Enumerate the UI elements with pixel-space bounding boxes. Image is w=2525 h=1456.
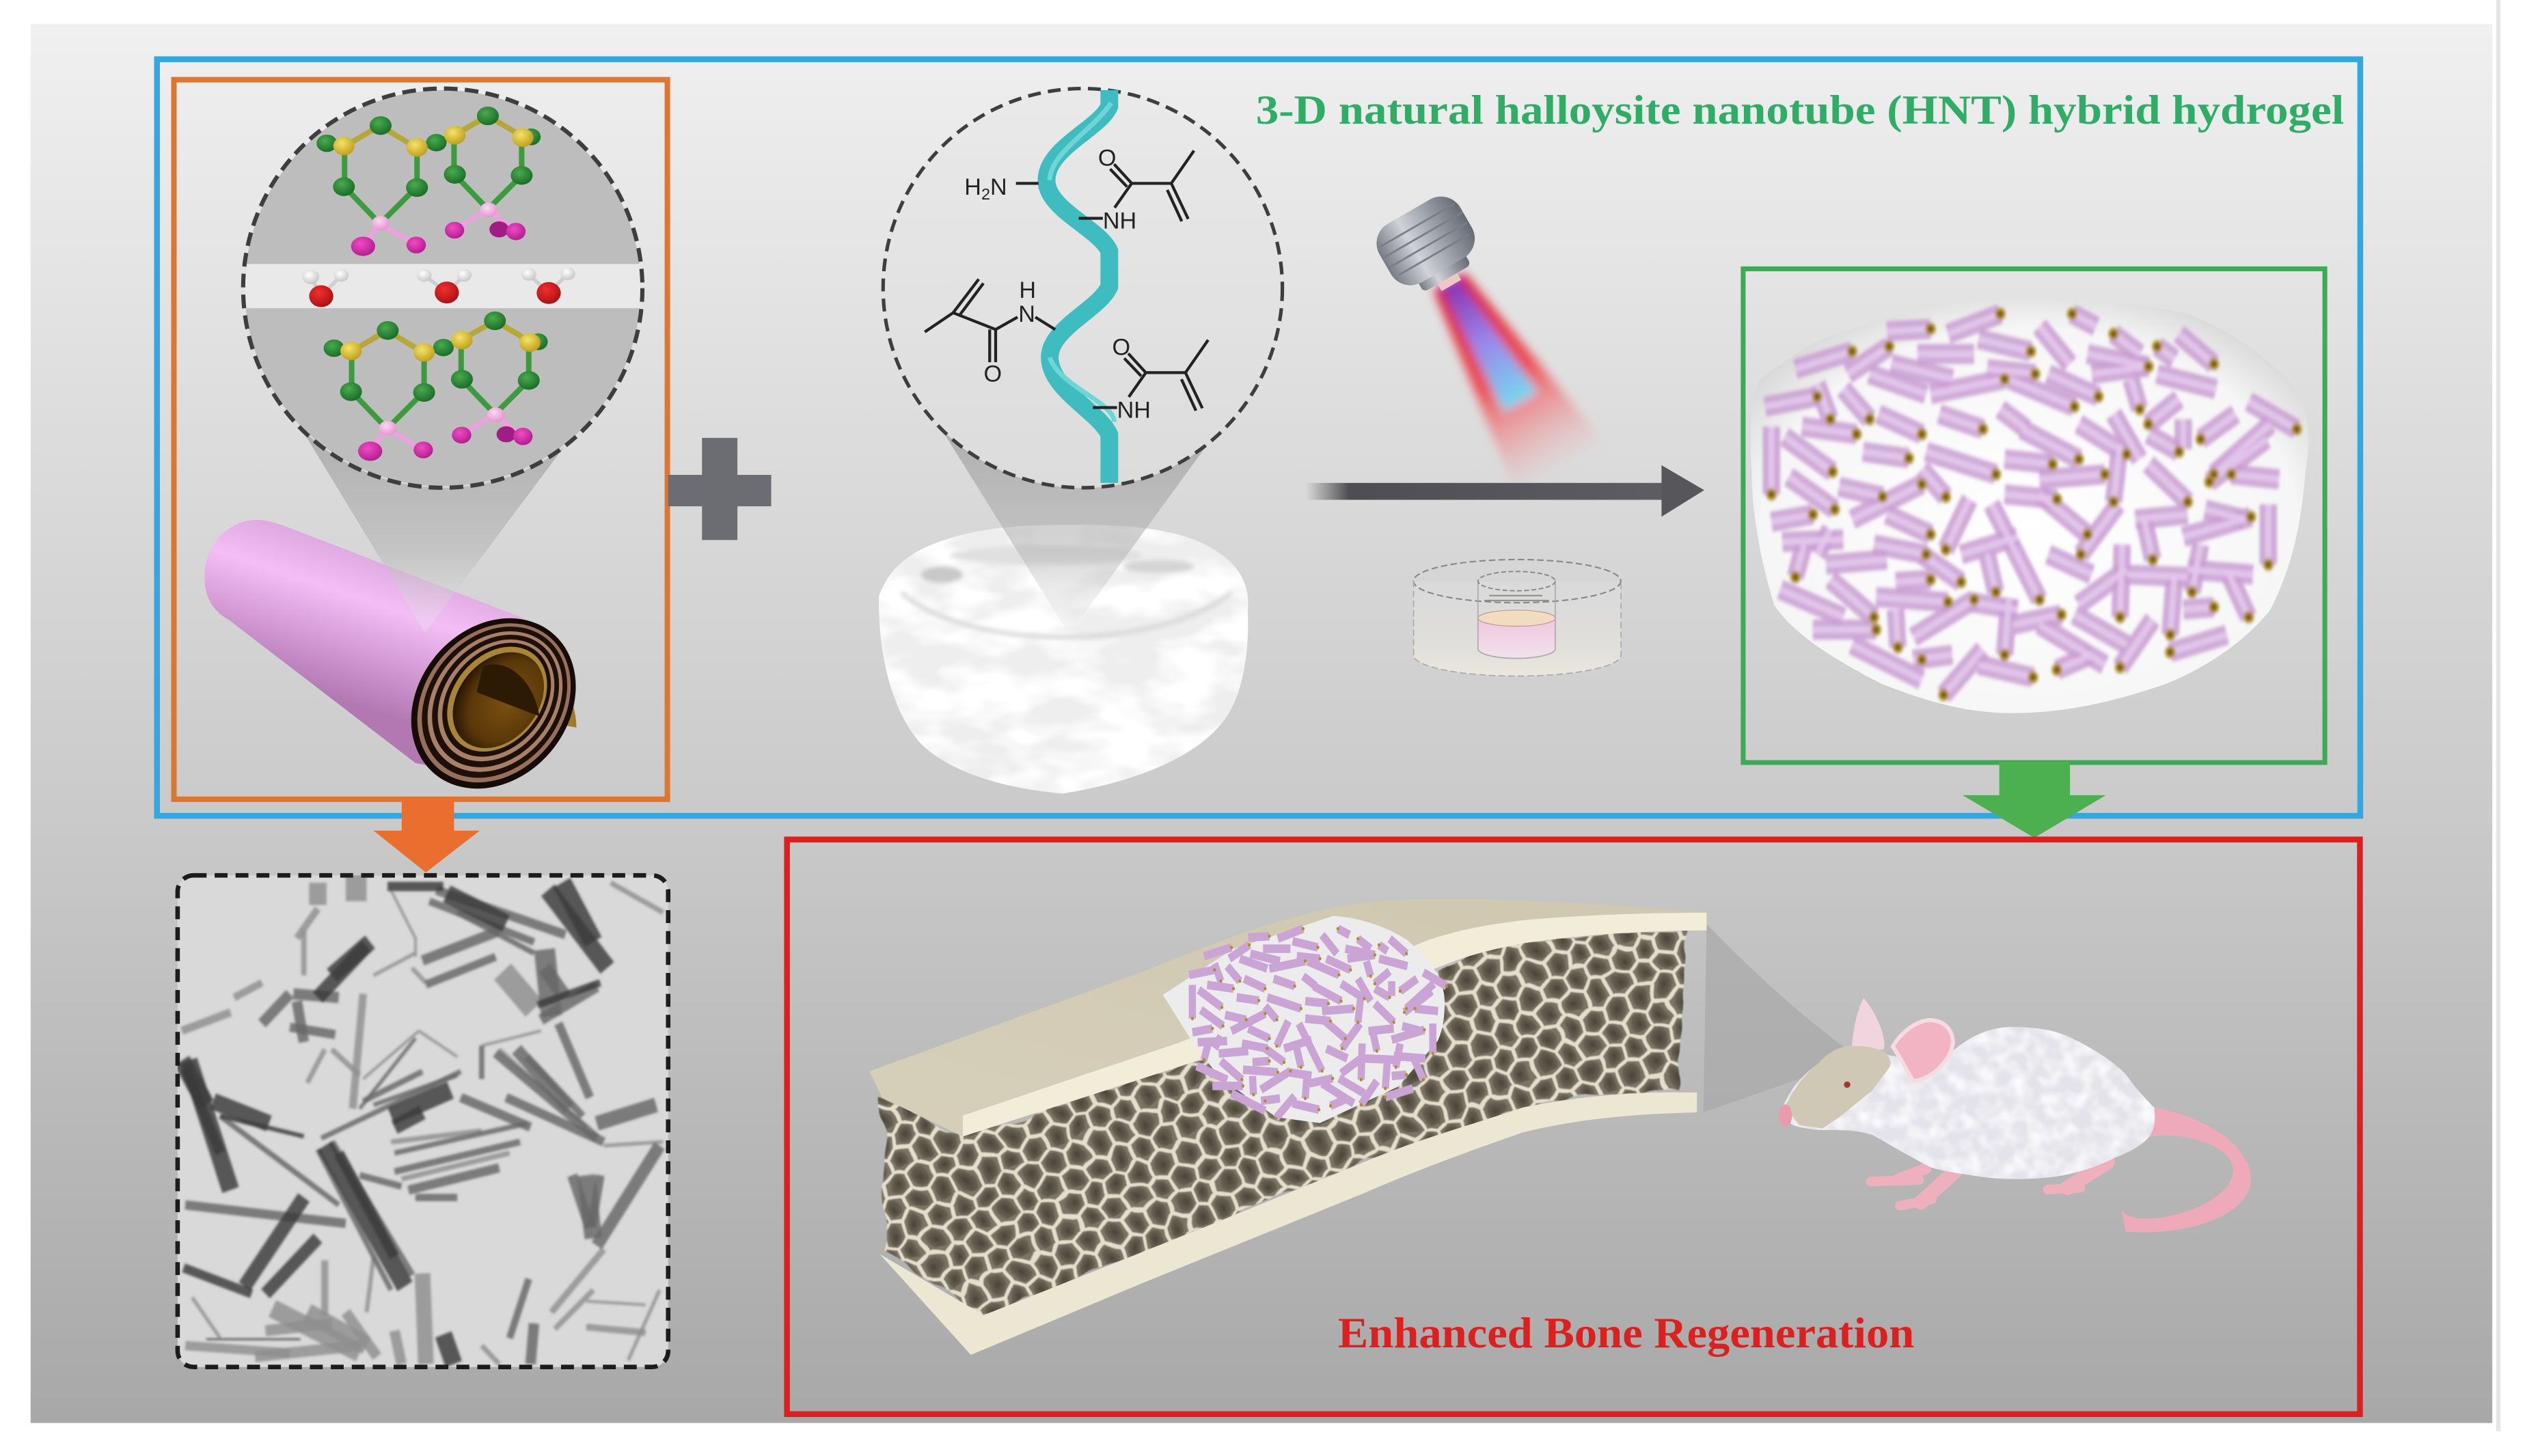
chemical labels: NH: [1117, 397, 1151, 423]
arrow: green down to bone regeneration: [1963, 761, 2106, 838]
TEM rods: [182, 883, 663, 1364]
chemical labels: H: [964, 174, 981, 200]
callout: GelMA molecule circle: [883, 89, 1283, 488]
bone bottom plate: [879, 1093, 1697, 1355]
panel: halloysite nanotube (orange frame): [174, 80, 668, 822]
orange frame: [174, 80, 668, 799]
back ear: [1851, 998, 1884, 1049]
eye: [1844, 1082, 1851, 1088]
bone top surface: [869, 899, 1706, 1136]
callout cone: nanotube magnifier: [301, 428, 564, 633]
panel: blue hybrid hydrogel frame: [157, 59, 2360, 816]
green frame: [1743, 269, 2325, 763]
mini nanotubes: [1189, 929, 1447, 1118]
chemical labels: H: [1019, 277, 1036, 303]
body: [1781, 1027, 2155, 1179]
molecular lattice: upper layer: [316, 107, 541, 256]
molecular lattice: lower layer: [324, 312, 548, 461]
icon: UV light lamp with beam: [1367, 184, 1607, 497]
bone top plate front edge: [963, 913, 1706, 1136]
callout: HNT crystal structure circle: [241, 81, 644, 491]
illustration: hydrogel patch on bone: [1163, 916, 1447, 1123]
cancellous honeycomb: [882, 932, 1687, 1315]
red frame: [787, 840, 2360, 1414]
icon: rolled nanotube: [204, 520, 610, 822]
illustration: bone cross-section: [869, 899, 1706, 1355]
nanotubes in hydrogel: [1765, 314, 2297, 695]
chemical labels: O: [984, 361, 1002, 387]
panel: bone regeneration (red frame): [787, 840, 2360, 1414]
illustration: mouse: [1779, 998, 2251, 1232]
water molecules: [303, 267, 575, 307]
chemical labels: NH: [1103, 208, 1136, 234]
tail: [2122, 1108, 2251, 1232]
chemical labels: O: [1098, 146, 1116, 171]
panel: TEM micrograph of nanotubes: [178, 875, 668, 1367]
icon: beaker in dish: [1413, 560, 1621, 676]
callout cone: peptide magnifier: [942, 430, 1207, 634]
callout cone: bone to mouse: [1704, 924, 1845, 1112]
chemical labels: [964, 146, 1151, 423]
chemical labels: N: [1018, 301, 1035, 327]
legs and feet: [1871, 1162, 2107, 1206]
chemical labels: N: [990, 174, 1007, 200]
panel: HNT hybrid hydrogel (green frame): [1743, 269, 2325, 763]
icon: plus sign: [668, 438, 772, 540]
heading: hybrid hydrogel title: 3-D natural halloysite nanotube (HNT) hybrid hydrogel: [1256, 87, 2344, 133]
arrow: crosslinking reaction: [1306, 465, 1704, 517]
icon: gelatin hydrogel disc: [879, 525, 1248, 794]
helix ribbon: [1046, 90, 1114, 483]
exposed skull: [1785, 1046, 1891, 1129]
chemical labels: O: [1113, 334, 1130, 360]
chemical bonds: [925, 151, 1208, 411]
hydrogel disc body: [1751, 299, 2308, 713]
nose: [1779, 1104, 1792, 1127]
text: Enhanced Bone Regeneration: Enhanced Bone Regeneration: [1338, 1308, 1914, 1357]
front ear: [1893, 1020, 1953, 1081]
arrow: orange down to TEM image: [374, 797, 480, 873]
right edge sliver: [2496, 0, 2500, 1431]
chemical labels: 2: [981, 185, 990, 203]
